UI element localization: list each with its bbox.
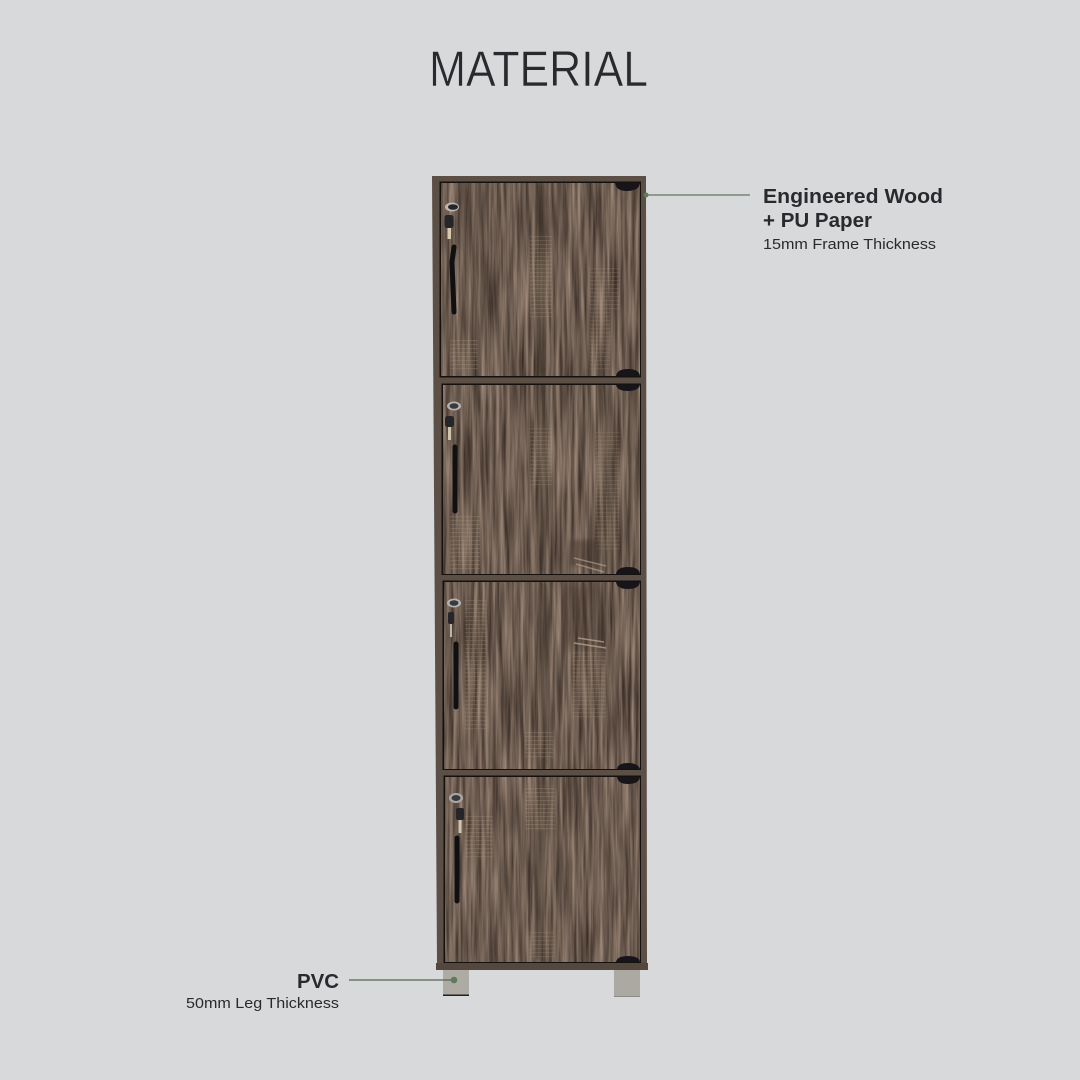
door 4 [444, 776, 641, 963]
handle: door 3 [454, 644, 458, 707]
callout text: pvc: PVC [297, 971, 339, 993]
hinge: bottom [616, 956, 640, 962]
callout text: engineered wood: 15mm Frame Thickness [763, 236, 936, 253]
lock and key: door 4 [449, 793, 464, 833]
lock and key: door 2 [445, 402, 461, 440]
leg: right [614, 970, 640, 997]
door 3 [442, 580, 641, 770]
door 1 [440, 182, 641, 378]
callout text: engineered wood: Engineered Wood [763, 186, 943, 208]
door 2 [442, 384, 641, 575]
handle: door 2 [452, 447, 458, 511]
hinges: shelf 2 [616, 567, 640, 589]
handle: door 1 [452, 247, 454, 312]
cabinet frame [432, 176, 647, 963]
leg: left [443, 970, 469, 996]
hinge: top [615, 183, 640, 191]
lock and key: door 3 [447, 598, 461, 637]
callout line: engineered wood [644, 192, 750, 198]
callout line: pvc [349, 977, 457, 983]
title: MATERIAL [429, 41, 648, 97]
cabinet illustration [432, 176, 648, 997]
bottom rail [436, 963, 648, 970]
hinges: shelf 3 [617, 763, 640, 784]
callout text: pvc [186, 971, 339, 1012]
callout text: pvc: 50mm Leg Thickness [186, 995, 339, 1012]
callout text: engineered wood [763, 186, 943, 253]
hinges: shelf 1 [616, 369, 640, 391]
callout text: engineered wood: + PU Paper [763, 210, 872, 232]
lock and key: door 1 [444, 202, 459, 239]
handle: door 4 [454, 838, 460, 901]
